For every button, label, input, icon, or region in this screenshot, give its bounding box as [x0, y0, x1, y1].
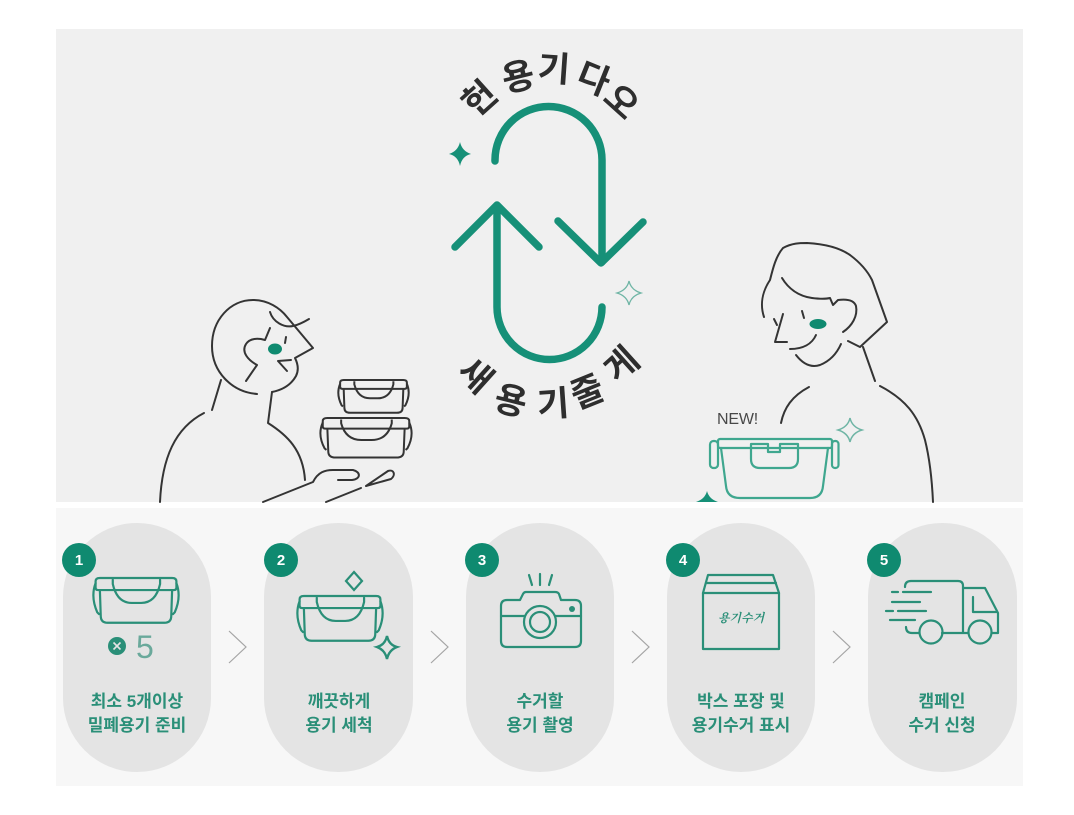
pill	[63, 523, 211, 772]
caption: 용기 세척	[305, 716, 373, 735]
label: NEW!: NEW!	[717, 411, 758, 428]
icon: times sign	[108, 637, 126, 655]
heading: old containers (arc text): 헌	[455, 74, 505, 124]
arrow: step 3 to 4	[632, 631, 649, 663]
icon: clean container	[297, 596, 383, 641]
panel: steps background	[56, 508, 1023, 786]
heading: new containers (arc text): 기	[536, 384, 571, 425]
badge	[666, 543, 700, 577]
heading: new containers (arc text)	[450, 340, 647, 425]
box handwriting: 용기수거	[718, 611, 766, 625]
number: 5	[880, 552, 888, 569]
icon: big sparkle	[377, 636, 397, 659]
head and face	[762, 243, 933, 502]
step 4	[666, 523, 815, 772]
number: 4	[679, 552, 688, 569]
number: 3	[478, 552, 486, 569]
person: left figure holding containers	[160, 300, 412, 502]
caption: 캠페인	[919, 692, 965, 711]
caption: 박스 포장 및	[697, 692, 785, 711]
panel: top illustration	[56, 29, 1023, 502]
arrow: step 4 to 5	[833, 631, 850, 663]
step 1	[62, 523, 211, 772]
icon: sparkle beside new container	[838, 418, 862, 442]
number: 1	[75, 552, 83, 569]
icon: parcel box	[703, 575, 779, 649]
containers: stacked	[320, 380, 412, 458]
icon: camera	[501, 574, 581, 647]
step 3	[465, 523, 614, 772]
arrow: step 2 to 3	[431, 631, 448, 663]
pill	[667, 523, 815, 772]
caption: 밀폐용기 준비	[88, 716, 186, 735]
icon: outline sparkle	[617, 281, 641, 305]
heading: new containers (arc text): 용	[490, 379, 531, 424]
pill	[466, 523, 614, 772]
pill	[868, 523, 1017, 772]
heading: new containers (arc text): 새	[450, 351, 500, 401]
icon: clipped sparkle at panel edge	[696, 491, 718, 502]
heading: old containers (arc text)	[455, 49, 646, 127]
heading: old containers (arc text): 기	[536, 49, 571, 90]
number: 2	[277, 552, 285, 569]
cheek	[810, 319, 826, 329]
step 5	[867, 523, 1017, 772]
caption: 수거 신청	[908, 716, 976, 735]
head and face	[160, 300, 394, 502]
step 2	[264, 523, 413, 772]
icon: small sparkle	[346, 572, 362, 590]
quantity: 5	[136, 629, 154, 665]
heading: old containers (arc text): 용	[498, 55, 539, 100]
heading: new containers (arc text): 게	[597, 340, 647, 390]
icon: filled sparkle	[449, 142, 471, 166]
icon: circular exchange arrows	[455, 106, 643, 360]
badge	[62, 543, 96, 577]
arrow: step 1 to 2	[229, 631, 246, 663]
icon: delivery truck	[886, 581, 998, 644]
badge	[465, 543, 499, 577]
badge	[867, 543, 901, 577]
caption: 용기 촬영	[506, 716, 574, 735]
heading: old containers (arc text): 다	[571, 55, 616, 104]
caption: 수거할	[517, 692, 564, 711]
badge	[264, 543, 298, 577]
caption: 용기수거 표시	[692, 716, 790, 735]
heading: new containers (arc text): 줄	[565, 368, 610, 417]
caption: 깨끗하게	[308, 692, 370, 711]
heading: old containers (arc text): 오	[596, 77, 646, 127]
pill	[264, 523, 413, 772]
icon: new container	[710, 439, 838, 498]
icon: container	[93, 578, 179, 623]
cheek	[268, 344, 282, 354]
caption: 최소 5개이상	[91, 692, 184, 711]
person: right figure with new container	[762, 243, 933, 502]
times mark	[114, 642, 120, 650]
